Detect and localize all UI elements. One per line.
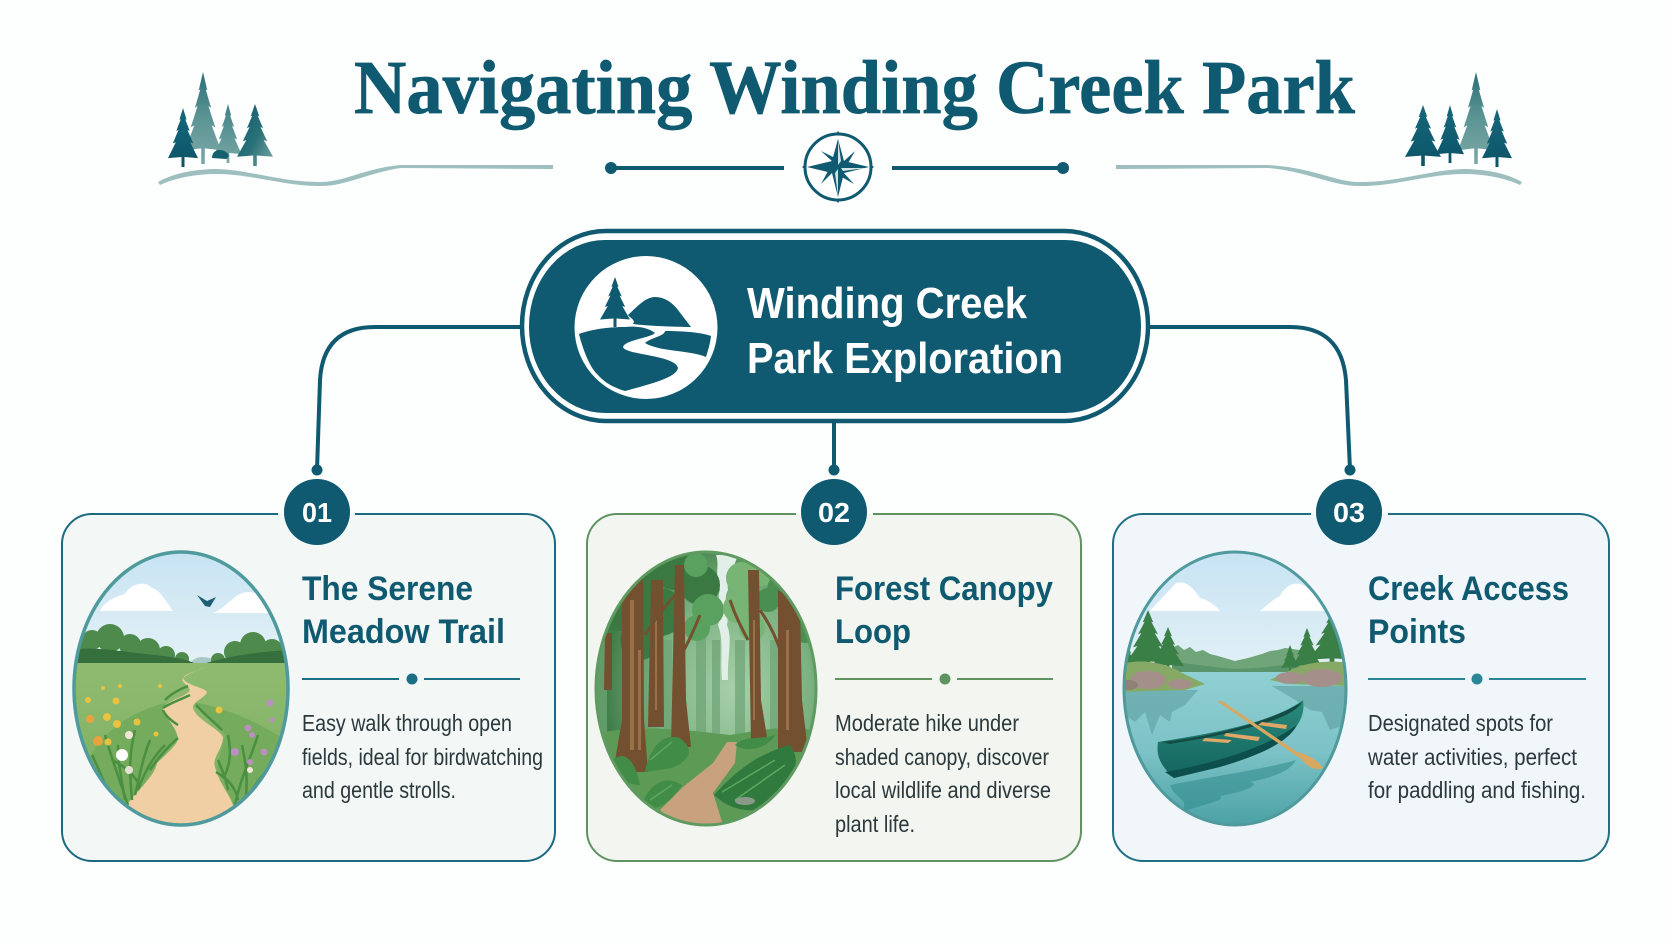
description: [1367, 710, 1586, 803]
icon: park logo: [574, 256, 718, 399]
illustration: canoe on lake: [1114, 548, 1356, 832]
badge 01: 01: [302, 497, 332, 528]
panel: Creek Access Points: [1113, 479, 1609, 861]
badge 01: [284, 479, 350, 545]
panel: Forest Canopy Loop: [587, 479, 1081, 861]
description: fields, ideal for birdwatching: [302, 744, 543, 770]
description: Easy walk through open: [302, 710, 512, 736]
divider: [835, 674, 1053, 684]
heading: Creek Access: [1368, 570, 1569, 608]
title divider with compass: [605, 131, 1069, 203]
illustration: forest path: [590, 542, 825, 830]
heading: [302, 570, 505, 651]
icon: right pine trees and hill line: [1116, 72, 1522, 186]
heading: The Serene: [302, 570, 473, 608]
description: and gentle strolls.: [302, 777, 456, 803]
badge 02: 02: [818, 497, 850, 528]
description: water activities, perfect: [1367, 744, 1578, 770]
icon: compass rose: [802, 131, 874, 203]
description: [302, 710, 543, 803]
pill text: Winding Creek: [747, 279, 1027, 328]
badge 03: [1316, 479, 1382, 545]
heading: Loop: [835, 613, 911, 651]
icon: left pine trees and hill line: [158, 72, 553, 186]
description: local wildlife and diverse: [835, 777, 1051, 803]
central pill: Winding Creek Park Exploration: [522, 231, 1148, 421]
badge 02: [801, 479, 867, 545]
title: Navigating Winding Creek Park: [354, 46, 1356, 130]
description: Designated spots for: [1368, 710, 1553, 736]
heading: [1368, 570, 1569, 651]
panel: The Serene Meadow Trail: [62, 479, 555, 861]
description: Moderate hike under: [835, 710, 1019, 736]
description: for paddling and fishing.: [1368, 777, 1586, 803]
connector lines: [312, 327, 1356, 476]
pill text: Park Exploration: [747, 334, 1063, 383]
heading: Forest Canopy: [835, 570, 1053, 608]
description: shaded canopy, discover: [835, 744, 1049, 770]
divider: [302, 674, 520, 684]
divider: [1368, 674, 1586, 684]
heading: Meadow Trail: [302, 613, 505, 651]
pill text: [747, 279, 1063, 383]
description: [835, 710, 1051, 837]
heading: Points: [1368, 613, 1466, 651]
description: plant life.: [835, 811, 915, 837]
badge 03: 03: [1333, 497, 1365, 528]
heading: [835, 570, 1053, 651]
illustration: meadow trail: [66, 548, 298, 832]
